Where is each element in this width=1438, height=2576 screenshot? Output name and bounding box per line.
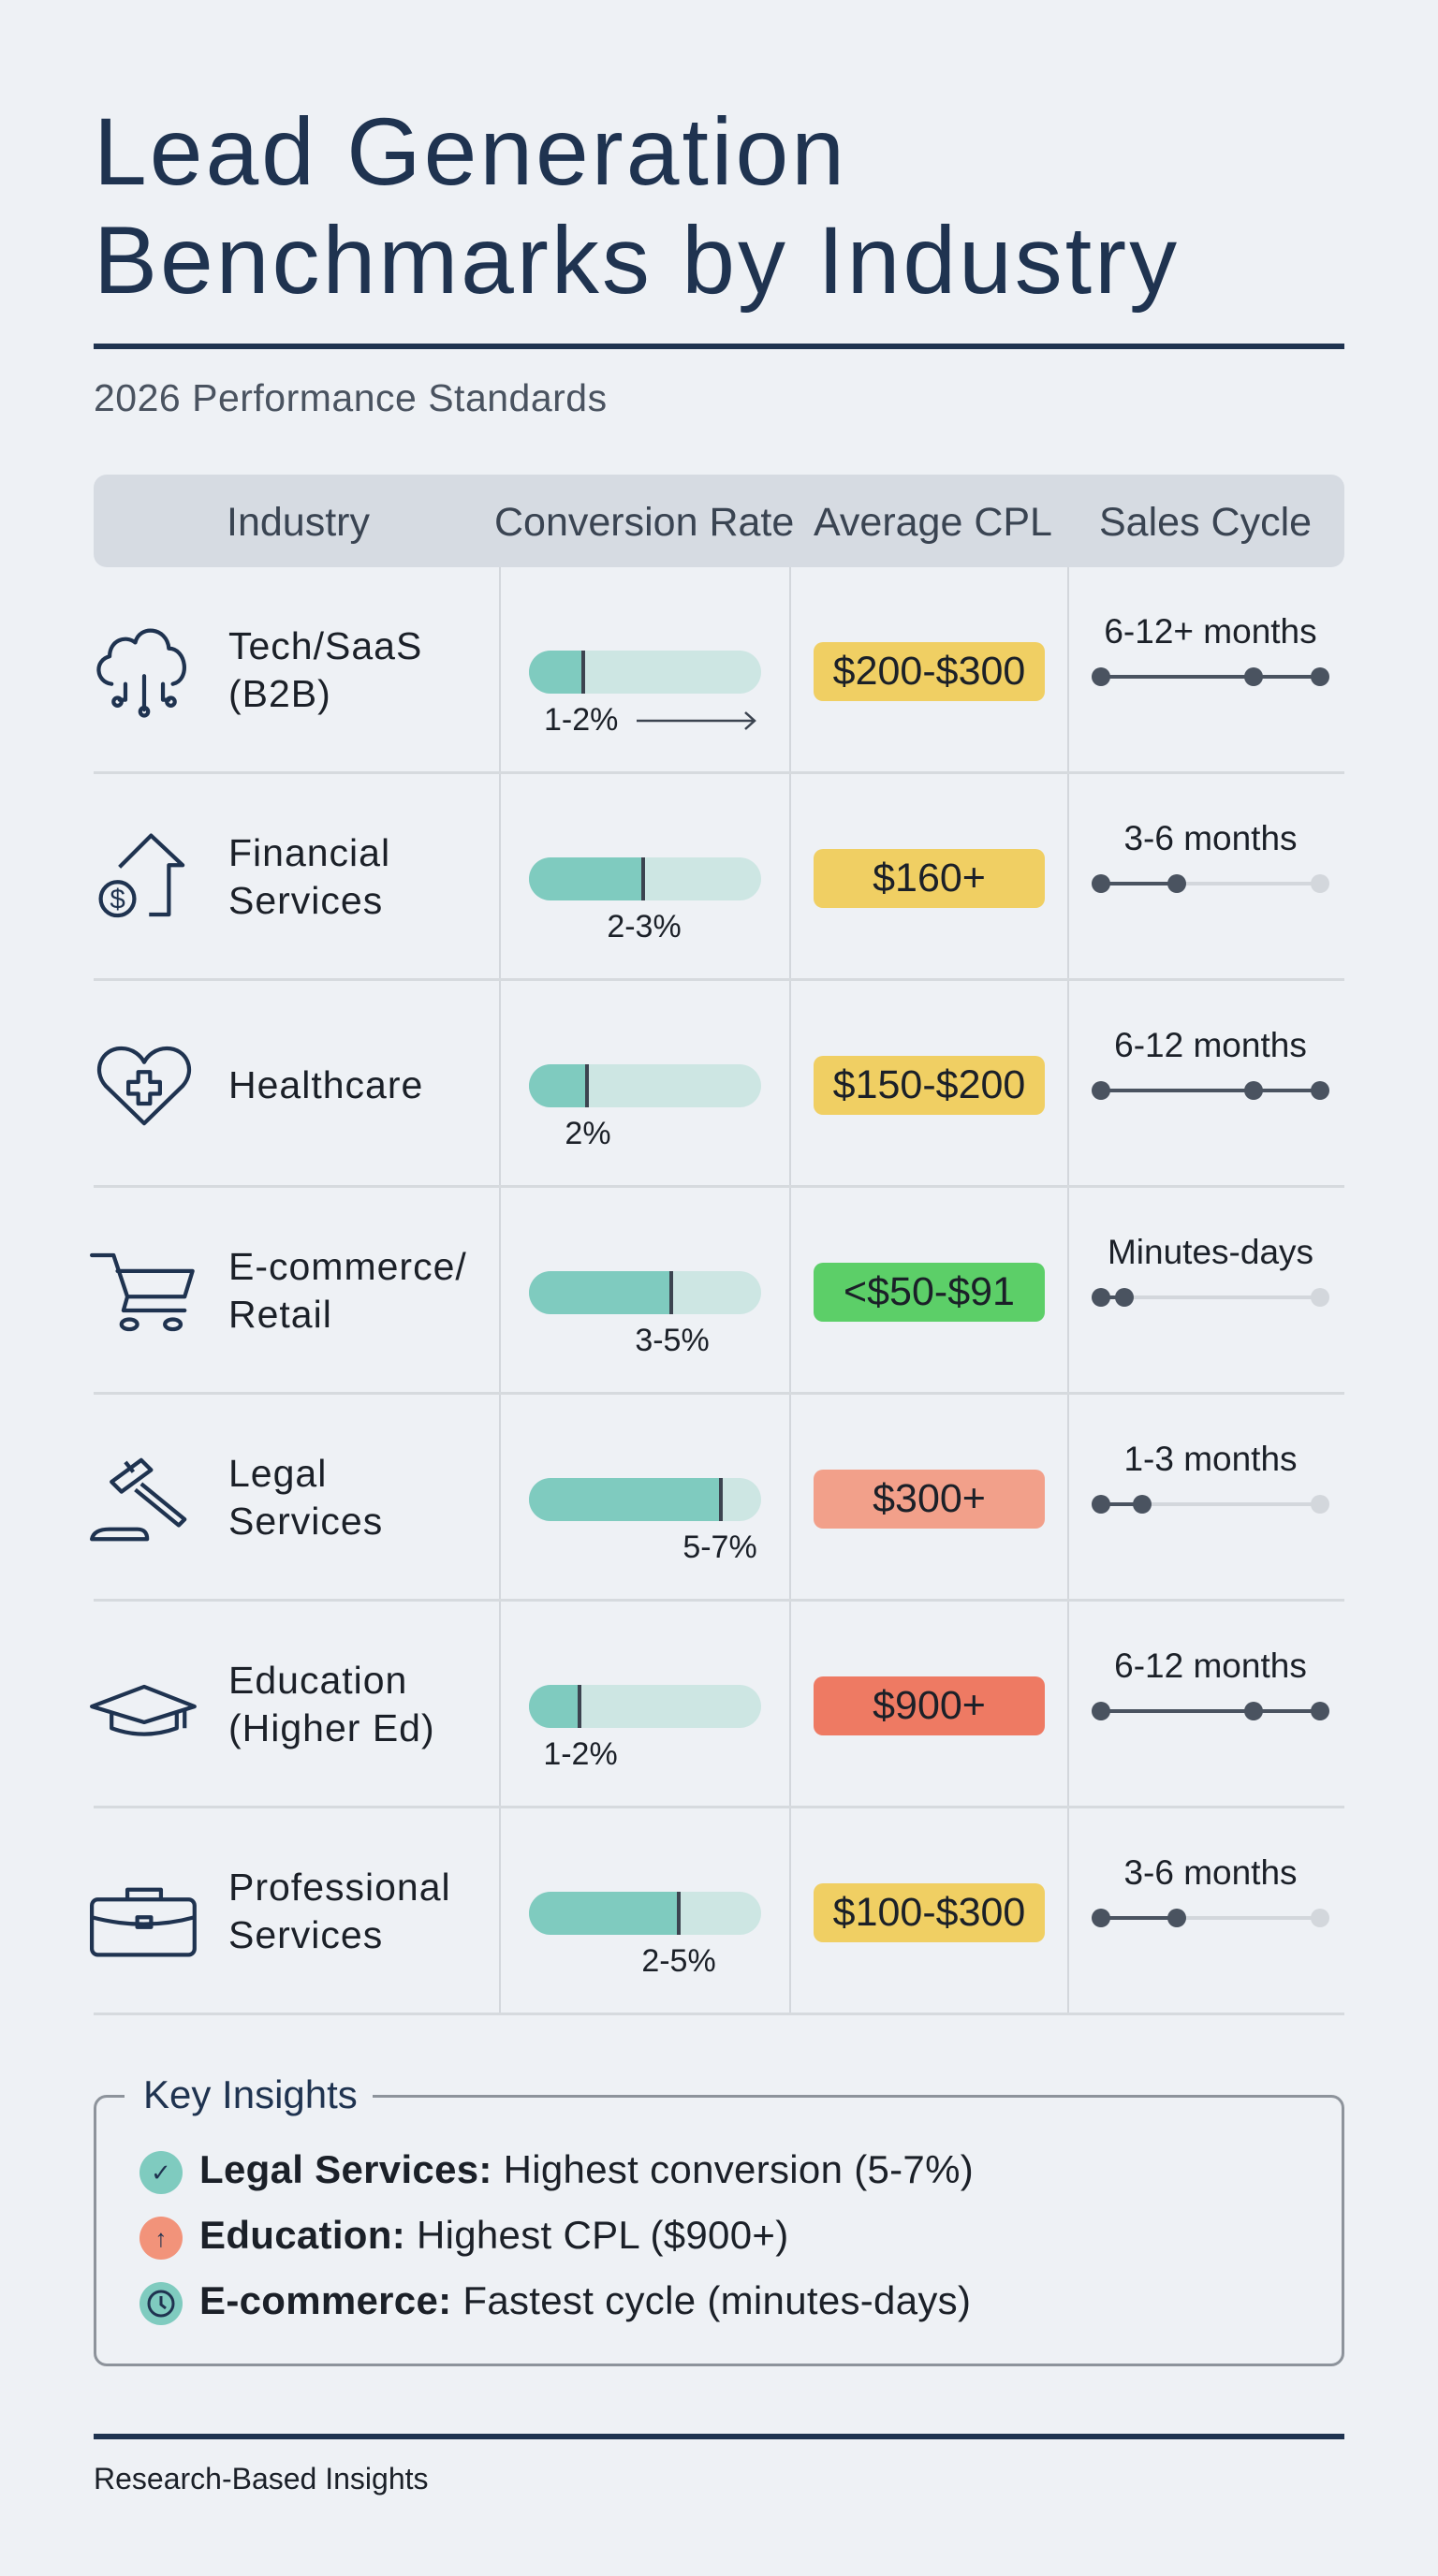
industry name: Services [228,1913,383,1956]
conversion label: 1-2% [543,1736,618,1772]
industry name [228,831,390,922]
icon: briefcase [90,1887,197,1956]
industry name: E-commerce/ [228,1245,467,1288]
conversion label: 5-7% [682,1530,757,1565]
conversion bar [529,1271,761,1314]
row: Education [94,1602,1344,1808]
industry name: Services [228,879,383,922]
icon: gavel [90,1458,187,1541]
conversion bar [529,1685,761,1728]
table header: Industry [227,500,370,545]
table header: Conversion Rate [494,500,794,545]
industry name [228,1245,467,1336]
insight 2: ↑ [154,2224,168,2252]
table header: Average CPL [814,500,1052,545]
industry name: Financial [228,831,390,874]
sales cycle: 3-6 months [1123,1853,1298,1892]
conversion label: 2-5% [641,1943,716,1979]
title [94,98,1180,314]
title: Benchmarks by Industry [94,207,1180,314]
cpl badge: $160+ [873,856,986,900]
conversion label: 1-2% [544,702,618,738]
sales cycle: 3-6 months [1123,819,1298,857]
cpl badge [814,1676,1045,1735]
subtitle: 2026 Performance Standards [94,376,608,419]
insight 1: Legal Services: Highest conversion (5-7%) [199,2147,974,2191]
cpl badge [814,849,1045,908]
table header: Sales Cycle [1099,500,1312,545]
sales cycle: 6-12 months [1114,1647,1307,1685]
cpl badge [814,1883,1045,1942]
cpl badge: $100-$300 [833,1890,1025,1935]
cpl badge [814,642,1045,701]
insight 1: ✓ [151,2159,171,2187]
conversion bar [529,1892,761,1935]
conversion label: 2-3% [607,909,682,944]
icon: money arrow [99,833,185,917]
cpl badge: $900+ [873,1683,986,1728]
cpl badge: $300+ [873,1476,986,1521]
cpl badge [814,1056,1045,1115]
row: E-commerce [94,1188,1344,1395]
cpl badge [814,1470,1045,1529]
arrow [637,711,756,730]
icon: heart [97,1046,191,1125]
conversion label: 3-5% [635,1323,710,1358]
sales cycle: 6-12+ months [1104,612,1317,651]
icon: cart [90,1252,195,1331]
conversion label: 2% [565,1116,611,1151]
industry name: (Higher Ed) [228,1706,435,1749]
cpl badge: $150-$200 [833,1062,1025,1107]
conversion bar [529,1478,761,1521]
conversion bar [529,651,761,694]
footer: Research-Based Insights [94,2462,429,2496]
title: Lead Generation [94,98,847,205]
heading: Key Insights [143,2072,358,2116]
conversion bar [529,857,761,900]
industry name: Professional [228,1866,451,1909]
industry name: Legal [228,1452,327,1495]
cpl badge [814,1263,1045,1322]
insight 3: E-commerce: Fastest cycle (minutes-days) [199,2278,971,2322]
sales cycle: 6-12 months [1114,1026,1307,1064]
cpl badge: <$50-$91 [844,1269,1015,1314]
industry name [228,1659,435,1749]
row: Legal [94,1395,1344,1602]
row: Tech/SaaS [94,567,1344,774]
industry name: Tech/SaaS [228,624,422,667]
industry name: Retail [228,1293,332,1336]
row: Financial [94,774,1344,981]
icon: money arrow: $ [110,885,125,915]
industry name: (B2B) [228,672,331,715]
row: Healthcare [94,981,1344,1188]
industry name [228,1866,451,1956]
industry name [228,624,422,715]
panel: key insights [94,2095,1344,2366]
icon: cloud [96,629,186,718]
industry name [228,1452,383,1543]
conversion bar [529,1064,761,1107]
sales cycle: 1-3 months [1123,1440,1298,1478]
cpl badge: $200-$300 [833,649,1025,694]
sales cycle: Minutes-days [1108,1233,1313,1271]
industry name: Services [228,1500,383,1543]
industry name: Education [228,1659,407,1702]
icon: grad cap [90,1685,197,1736]
insight 2: Education: Highest CPL ($900+) [199,2213,788,2257]
row: Professional [94,1808,1344,2015]
industry name: Healthcare [228,1063,423,1106]
table header [94,475,1344,567]
